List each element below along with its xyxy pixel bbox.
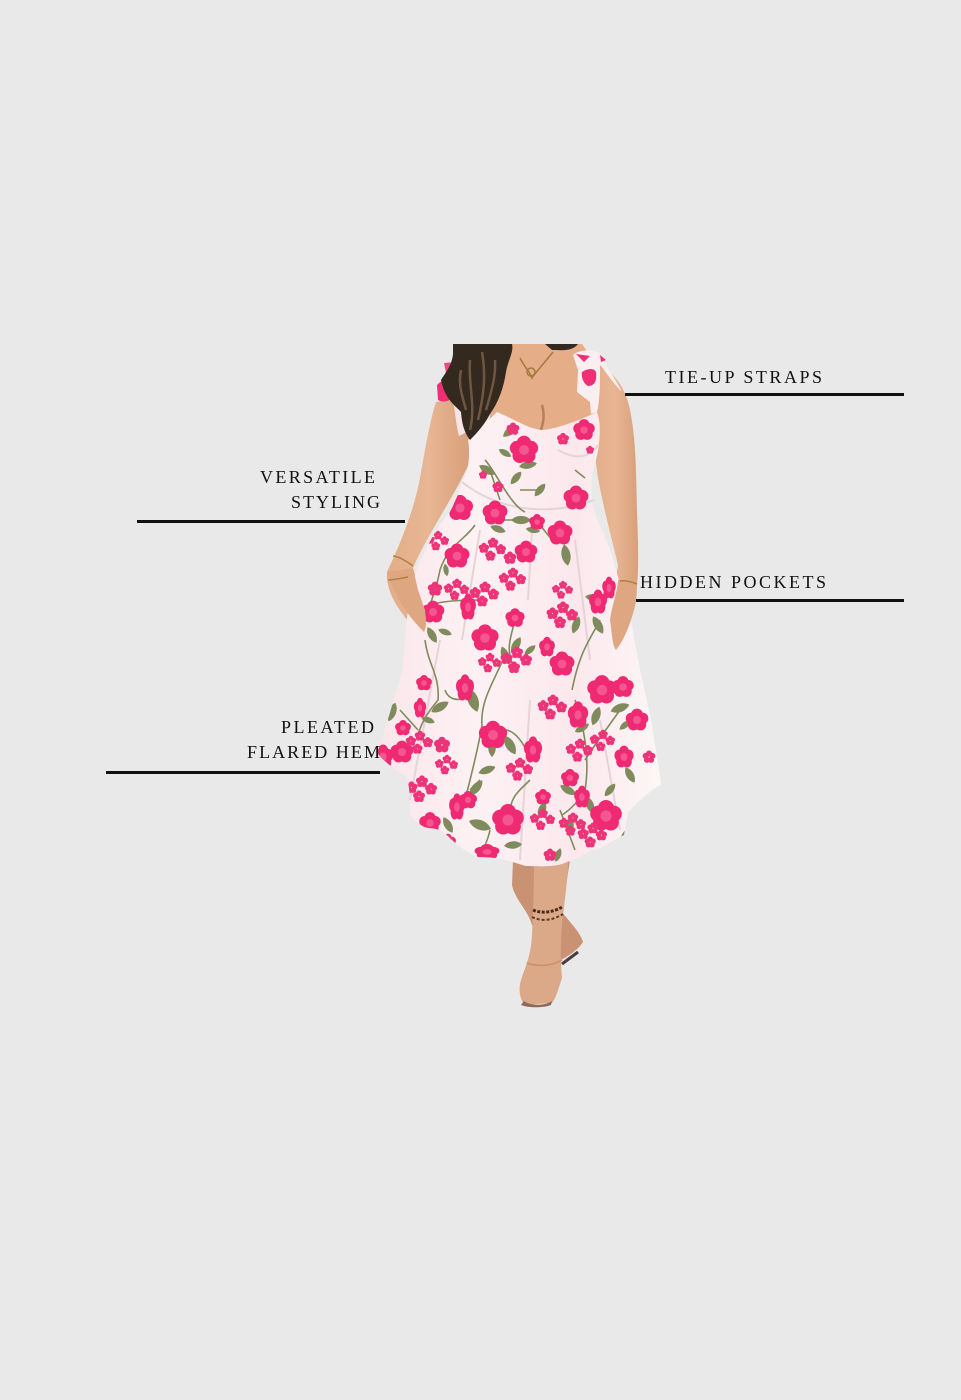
label: versatile styling: VERSATILE [260, 467, 375, 487]
dress [373, 344, 661, 866]
floral print [373, 419, 655, 863]
left shoulder strap and tie [437, 362, 467, 436]
label: pleated flared hem: PLEATED [281, 717, 374, 737]
right shoulder strap and tie [573, 350, 622, 414]
hands over dress [387, 556, 637, 650]
label: hidden pockets [636, 572, 904, 602]
long dark hair [441, 344, 578, 440]
dress silhouette [377, 412, 661, 866]
label: tie-up straps: TIE-UP STRAPS [665, 367, 822, 387]
figure wearing floral dress [106, 344, 904, 1007]
bodice seams and skirt pleats [410, 445, 620, 860]
large flowers [373, 419, 648, 859]
label: hidden pockets: HIDDEN POCKETS [640, 572, 826, 592]
small blossom clusters [406, 422, 655, 861]
label: pleated flared hem [106, 717, 380, 774]
label: pleated flared hem: FLARED HEM [247, 742, 380, 762]
label: versatile styling: STYLING [291, 492, 380, 512]
label: tie-up straps [625, 367, 904, 396]
arms and torso skin [387, 344, 638, 650]
legs and feet [512, 860, 583, 1007]
label: versatile styling [137, 467, 405, 523]
leaves [385, 422, 638, 863]
vines [400, 460, 620, 850]
